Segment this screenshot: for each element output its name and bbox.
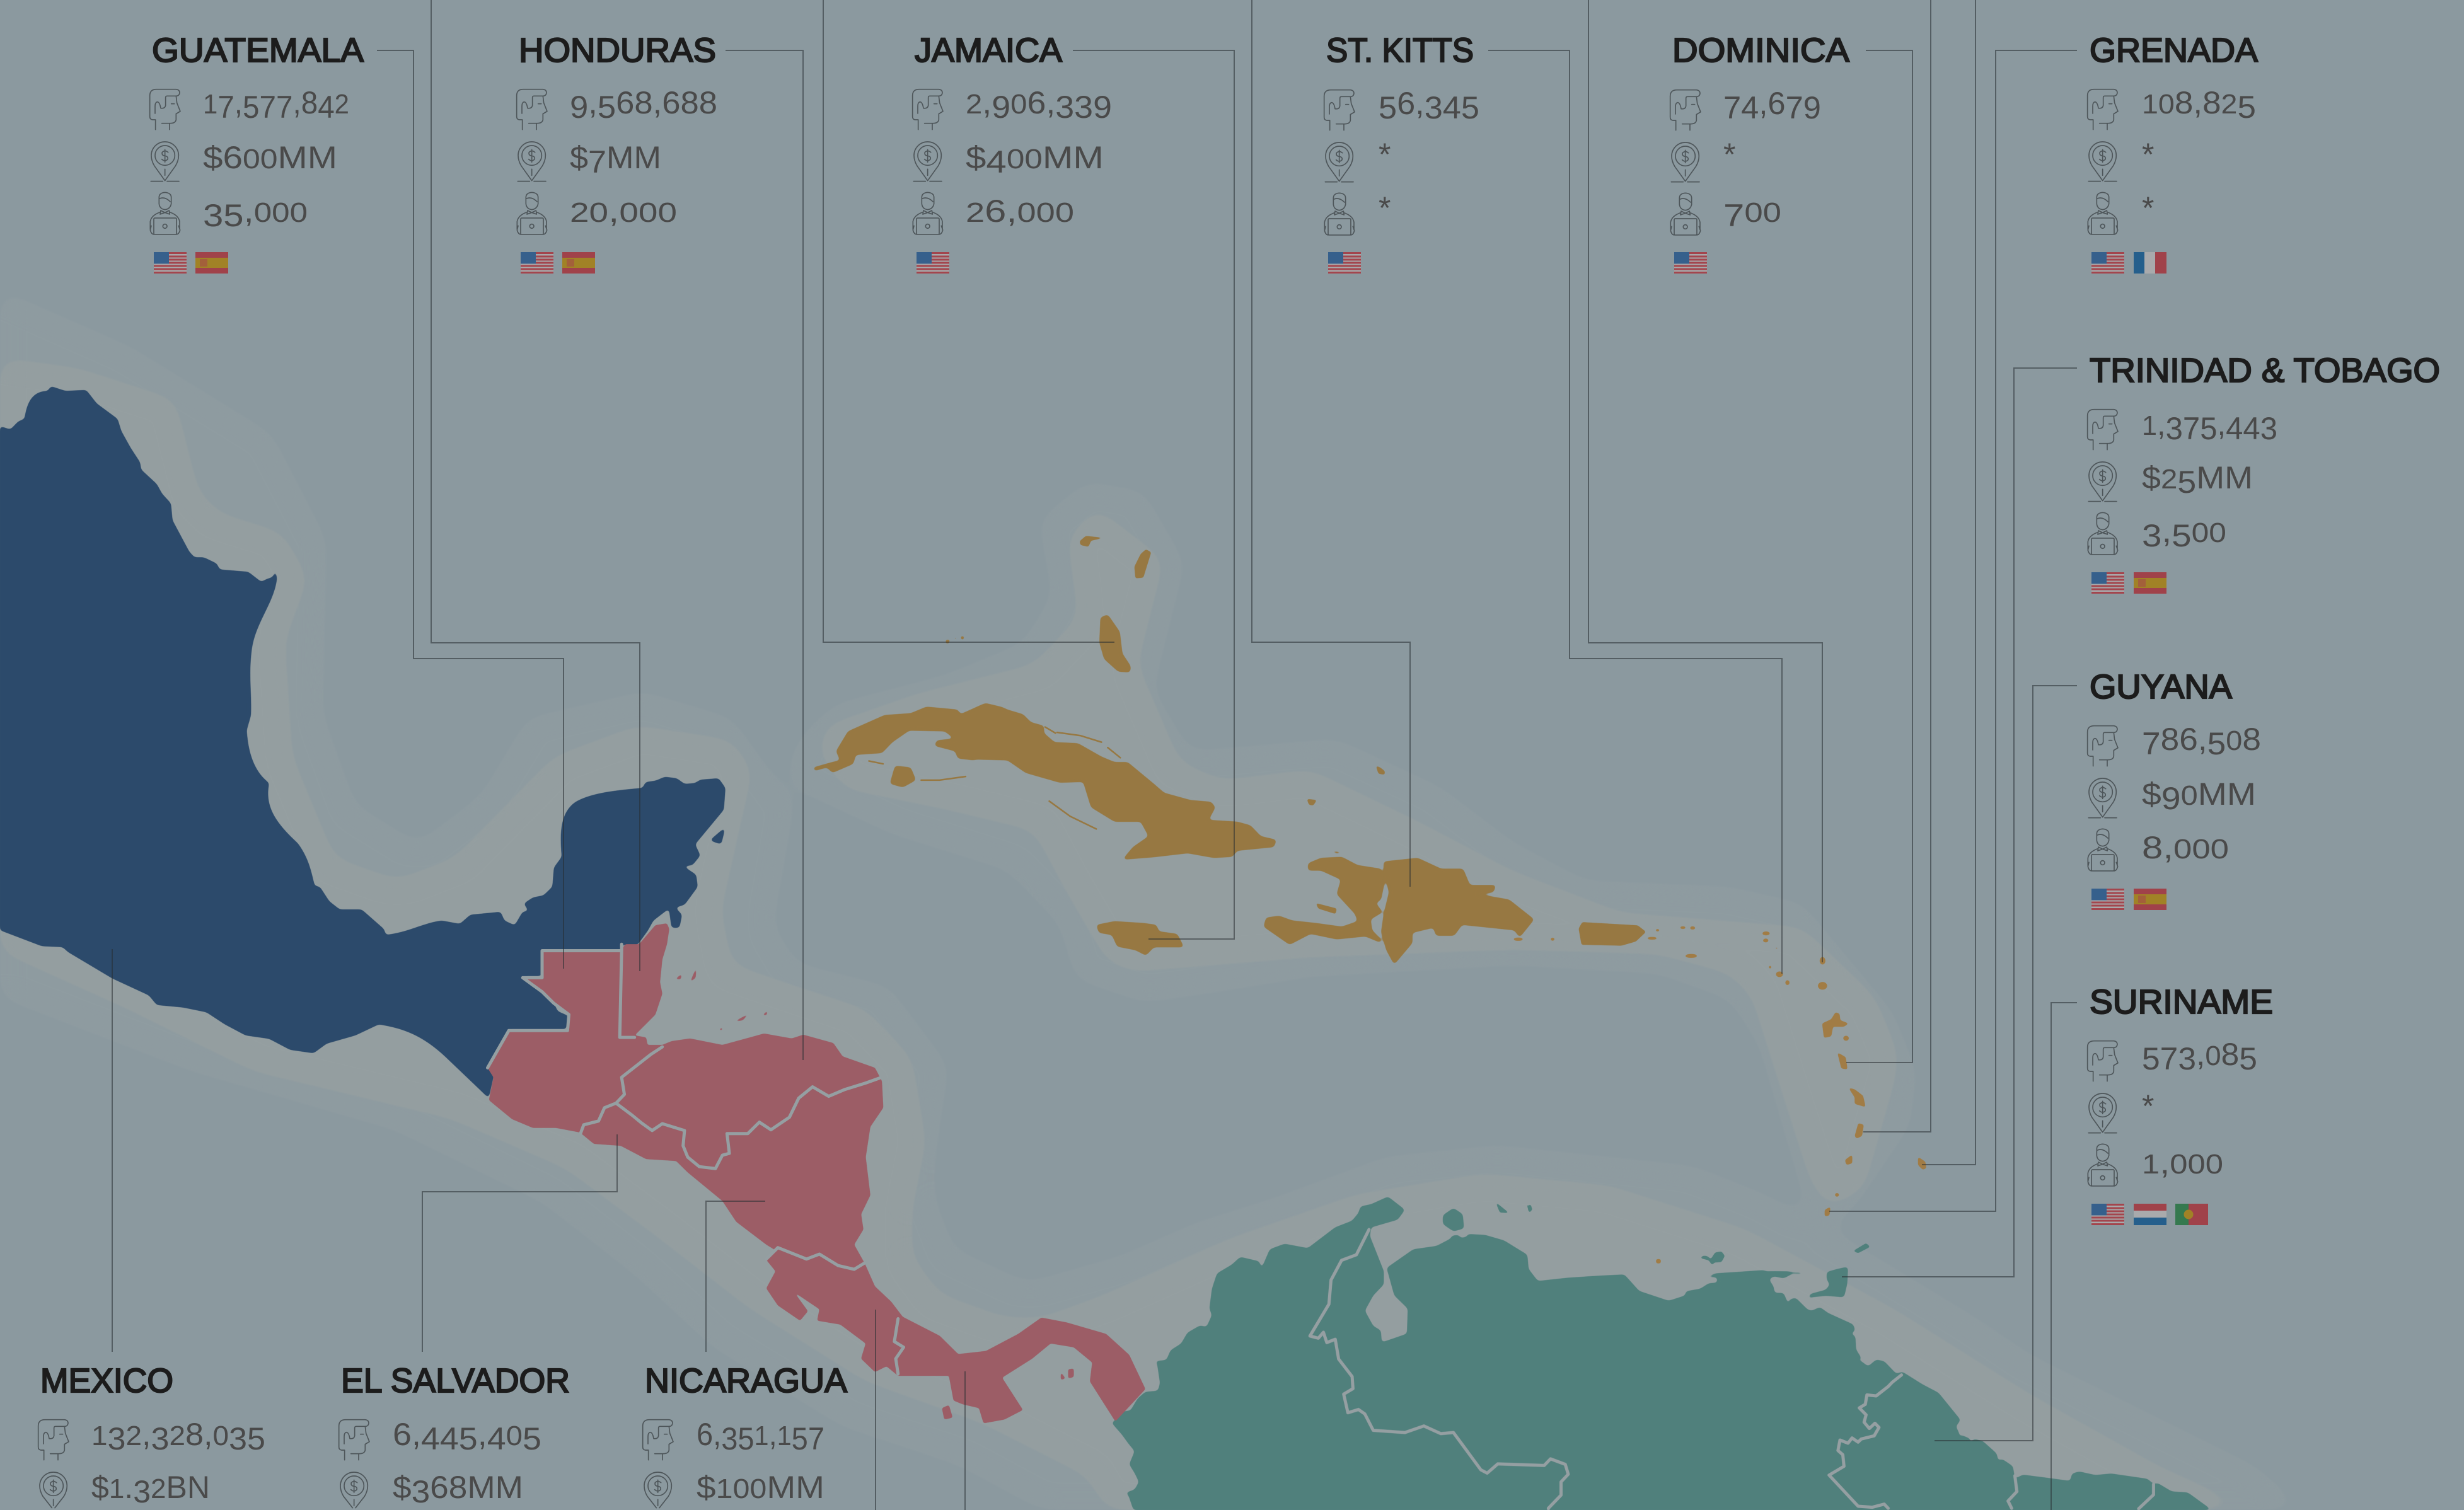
workers value: *: [1379, 190, 1391, 226]
leader: Dominica: [1846, 50, 1912, 1063]
money value: 3: [133, 1474, 151, 1509]
leader: Antigua: [1588, 0, 1822, 962]
country block: El Salvador: [339, 1362, 570, 1509]
country block: Trinidad & Tobago: [2088, 352, 2440, 594]
money value: $: [2142, 776, 2160, 812]
icon: population: [150, 89, 180, 130]
leader: Bahamas: [823, 0, 1114, 642]
workers value: 1,000: [2142, 1145, 2223, 1180]
workers value: 8,000: [2142, 830, 2229, 865]
country block: Guatemala: [150, 32, 364, 274]
country block: Dominica: [1670, 32, 1849, 274]
flag: USA: [2091, 252, 2124, 274]
leader: St. Lucia: [1863, 0, 1931, 1132]
flag: USA: [2091, 572, 2124, 594]
money value: 00: [1007, 144, 1043, 175]
money value: $: [966, 140, 983, 175]
flag: Netherlands: [2134, 1204, 2166, 1225]
map: South America (teal): [1111, 1197, 2212, 1510]
population value: 5: [2207, 726, 2226, 761]
leader: St. Kitts: [1488, 50, 1782, 974]
money value: BN: [166, 1470, 210, 1505]
workers value: 20,000: [570, 193, 677, 229]
heading: JAMAICA: [915, 32, 1062, 69]
heading: GUATEMALA: [152, 32, 364, 69]
population value: 1: [755, 1421, 769, 1451]
country block: Guyana: [2088, 668, 2261, 910]
sea shelf: inner depth contour: [0, 357, 2256, 1510]
heading: EL SALVADOR: [341, 1362, 570, 1400]
leader: Costa Rica: [875, 1310, 876, 1510]
leader: Honduras: [726, 50, 803, 1060]
flag: USA: [1328, 252, 1361, 274]
small cays around Cuba: [869, 727, 1120, 829]
workers value: ,: [2161, 514, 2172, 549]
icon: worker: [517, 192, 547, 234]
flag: France: [2134, 252, 2166, 274]
population value: 6,: [1397, 86, 1425, 121]
money value: MM: [2196, 460, 2253, 495]
population value: ,: [142, 1417, 151, 1452]
population value: 5: [2238, 89, 2256, 125]
icon: money: [2088, 142, 2117, 182]
flag: Spain: [195, 252, 228, 274]
workers value: *: [2142, 190, 2154, 226]
population value: 57: [792, 1421, 824, 1456]
money value: $: [570, 140, 587, 175]
money value: MM: [2198, 776, 2250, 812]
country borders: Central America: [487, 944, 904, 1374]
money value: *: [2142, 137, 2154, 172]
money value: 3: [412, 1474, 430, 1509]
icon: population: [1670, 90, 1701, 130]
country block: Nicaragua: [643, 1362, 847, 1508]
money value: MM: [1043, 140, 1095, 175]
country block: Suriname: [2088, 983, 2273, 1225]
leader: Jamaica: [1073, 50, 1234, 939]
heading: GRENADA: [2090, 32, 2258, 69]
icon: money: [518, 142, 546, 182]
workers value: 35: [203, 198, 244, 233]
icon: worker: [2088, 192, 2118, 234]
population value: ,: [588, 85, 598, 120]
population value: 0: [1010, 89, 1027, 120]
population value: 108,82: [2142, 85, 2236, 120]
population value: 577: [243, 89, 292, 125]
money value: MM: [606, 140, 661, 175]
sea shelf: outer depth contour: [0, 289, 2305, 1510]
icon: money: [340, 1472, 367, 1508]
icon: population: [339, 1420, 369, 1460]
icon: worker: [150, 192, 180, 234]
money value: *: [1723, 137, 1735, 172]
workers value: 5: [2172, 518, 2192, 553]
money value: 68MM: [430, 1470, 523, 1505]
small islands: Bahamas and Gonave: [946, 536, 1385, 914]
map: Greater Antilles (gold): [813, 536, 1534, 965]
heading: HONDURAS: [519, 32, 716, 69]
population value: 35: [229, 1421, 265, 1456]
leader: Grenada: [1829, 50, 2077, 1211]
population value: 3: [108, 1421, 126, 1456]
population value: 9: [570, 89, 588, 125]
flag: Portugal: [2175, 1204, 2208, 1225]
population value: ,1: [769, 1417, 792, 1452]
icon: money: [2088, 462, 2117, 502]
country block: Honduras: [517, 32, 717, 274]
heading: GUYANA: [2090, 668, 2232, 706]
workers value: 7: [1723, 198, 1744, 233]
icon: worker: [2088, 512, 2118, 555]
money value: 4: [986, 144, 1007, 180]
population value: 445: [421, 1421, 478, 1456]
money value: $2: [2142, 460, 2176, 495]
population value: ,: [234, 85, 243, 120]
population value: ,6: [1759, 86, 1786, 121]
population value: 79: [1786, 90, 1821, 125]
small islands: South American coast: [1496, 1202, 1870, 1265]
money value: 7: [588, 144, 606, 180]
country block: Mexico: [38, 1362, 265, 1509]
flag: Spain: [2134, 572, 2166, 594]
leader: Guyana: [1935, 686, 2077, 1441]
money value: $600MM: [203, 140, 337, 175]
population value: 2,: [966, 85, 991, 120]
leader: Panama: [964, 1371, 966, 1510]
population value: 68,688: [616, 85, 717, 120]
icon: population: [2088, 410, 2118, 450]
flag: Spain: [2134, 889, 2166, 910]
population value: 2: [126, 1421, 142, 1451]
money value: $: [393, 1470, 410, 1505]
workers value: 000: [254, 197, 308, 228]
icon: worker: [913, 192, 943, 234]
icon: population: [643, 1420, 673, 1460]
money value: $1.: [91, 1470, 133, 1505]
leader: Mexico: [112, 949, 113, 1352]
heading: MEXICO: [40, 1362, 173, 1400]
leader: Nicaragua: [706, 1201, 765, 1352]
money value: 0: [2181, 780, 2198, 811]
workers value: 26,000: [966, 193, 1074, 229]
icon: worker: [1670, 193, 1701, 235]
country block: Grenada: [2088, 32, 2258, 274]
flag: USA: [521, 252, 553, 274]
population value: 339: [1055, 89, 1112, 125]
leader: Trinidad & Tobago: [1842, 368, 2077, 1277]
workers value: 3: [2142, 518, 2161, 553]
icon: worker: [2088, 1144, 2118, 1186]
heading: SURINAME: [2090, 983, 2273, 1021]
icon: money: [913, 142, 942, 182]
flag: USA: [1674, 252, 1707, 274]
flag: Spain: [562, 252, 595, 274]
country block: St. Kitts: [1324, 32, 1479, 274]
money value: 9: [2161, 781, 2181, 816]
population value: 4: [318, 89, 335, 125]
money value: 2: [151, 1473, 166, 1504]
icon: money: [151, 142, 179, 182]
population value: 7: [217, 89, 234, 125]
population value: ,: [2196, 1037, 2205, 1072]
population value: 2: [335, 89, 349, 120]
icon: population: [913, 89, 943, 130]
money value: $100MM: [697, 1470, 824, 1505]
population value: 5: [2239, 1041, 2257, 1076]
workers value: ,: [244, 193, 254, 229]
icon: population: [1324, 90, 1355, 130]
population value: 443: [2226, 411, 2277, 446]
population value: 6,: [697, 1417, 723, 1452]
icon: worker: [1324, 193, 1355, 235]
map: Central America (red): [487, 923, 1145, 1423]
country borders: Guianas: [1829, 1375, 2154, 1509]
population value: 1: [91, 1421, 108, 1451]
money value: 5: [2177, 464, 2196, 500]
population value: ,: [478, 1417, 487, 1452]
population value: 9: [992, 89, 1010, 125]
workers value: 00: [2192, 517, 2226, 548]
heading: DOMINICA: [1672, 32, 1849, 69]
flag: USA: [917, 252, 949, 274]
icon: money: [1671, 142, 1699, 182]
icon: money: [2088, 1093, 2117, 1133]
population value: 573: [2142, 1041, 2196, 1076]
leader lines connecting labels to countries: [112, 0, 2077, 1510]
money value: *: [2142, 1088, 2154, 1124]
population value: 5: [598, 89, 616, 125]
population value: 3: [151, 1421, 170, 1456]
population value: 0: [506, 1421, 523, 1451]
population value: 5: [1379, 90, 1397, 125]
country borders: South America: [1310, 1230, 1568, 1509]
icon: population: [2088, 1041, 2118, 1081]
population value: 0: [2226, 725, 2242, 756]
icon: worker: [2088, 829, 2118, 871]
leader: El Salvador: [422, 1134, 617, 1352]
icon: population: [517, 89, 547, 130]
population value: 2: [170, 1421, 185, 1451]
population value: 5: [523, 1421, 541, 1456]
flag: USA: [2091, 1204, 2124, 1225]
population value: 4: [487, 1421, 506, 1456]
money value: *: [1379, 137, 1391, 172]
workers value: 00: [1744, 197, 1781, 228]
population value: 86,: [2161, 722, 2207, 757]
heading: TRINIDAD & TOBAGO: [2090, 352, 2440, 389]
map: Mexico (blue): [0, 386, 726, 1098]
country block: Jamaica: [913, 32, 1112, 274]
flag: USA: [2091, 889, 2124, 910]
population value: ,: [2218, 406, 2226, 442]
icon: money: [2088, 778, 2117, 818]
icon: money: [644, 1472, 671, 1508]
leader: Guatemala: [377, 50, 564, 969]
population value: 1,: [2142, 406, 2166, 442]
icon: population: [38, 1420, 69, 1460]
population value: 6,: [1027, 85, 1053, 120]
population value: 8,0: [185, 1417, 228, 1452]
icon: money: [1325, 142, 1353, 182]
leader: Barbados: [1922, 0, 1975, 1165]
leader: Suriname: [2051, 1003, 2077, 1510]
heading: ST. KITTS: [1326, 32, 1474, 69]
population value: 375: [2166, 411, 2218, 446]
flag: USA: [154, 252, 187, 274]
icon: population: [2088, 89, 2118, 130]
population value: 08: [2205, 1037, 2238, 1072]
leader: Haiti and Dominican Republic: [1252, 0, 1410, 887]
population value: 7: [2142, 726, 2161, 761]
heading: NICARAGUA: [645, 1362, 847, 1400]
population value: 35: [721, 1421, 755, 1456]
population value: ,8: [292, 85, 318, 120]
leader: Belize: [431, 0, 640, 971]
icon: population: [2088, 726, 2118, 766]
population value: 74: [1723, 90, 1759, 125]
map: Puerto Rico and Lesser Antilles (gold): [1513, 922, 1926, 1264]
population value: 1: [203, 89, 217, 120]
population value: 345: [1425, 90, 1479, 125]
population value: 6,: [393, 1417, 419, 1452]
icon: money: [40, 1472, 67, 1508]
population value: 8: [2242, 722, 2260, 757]
